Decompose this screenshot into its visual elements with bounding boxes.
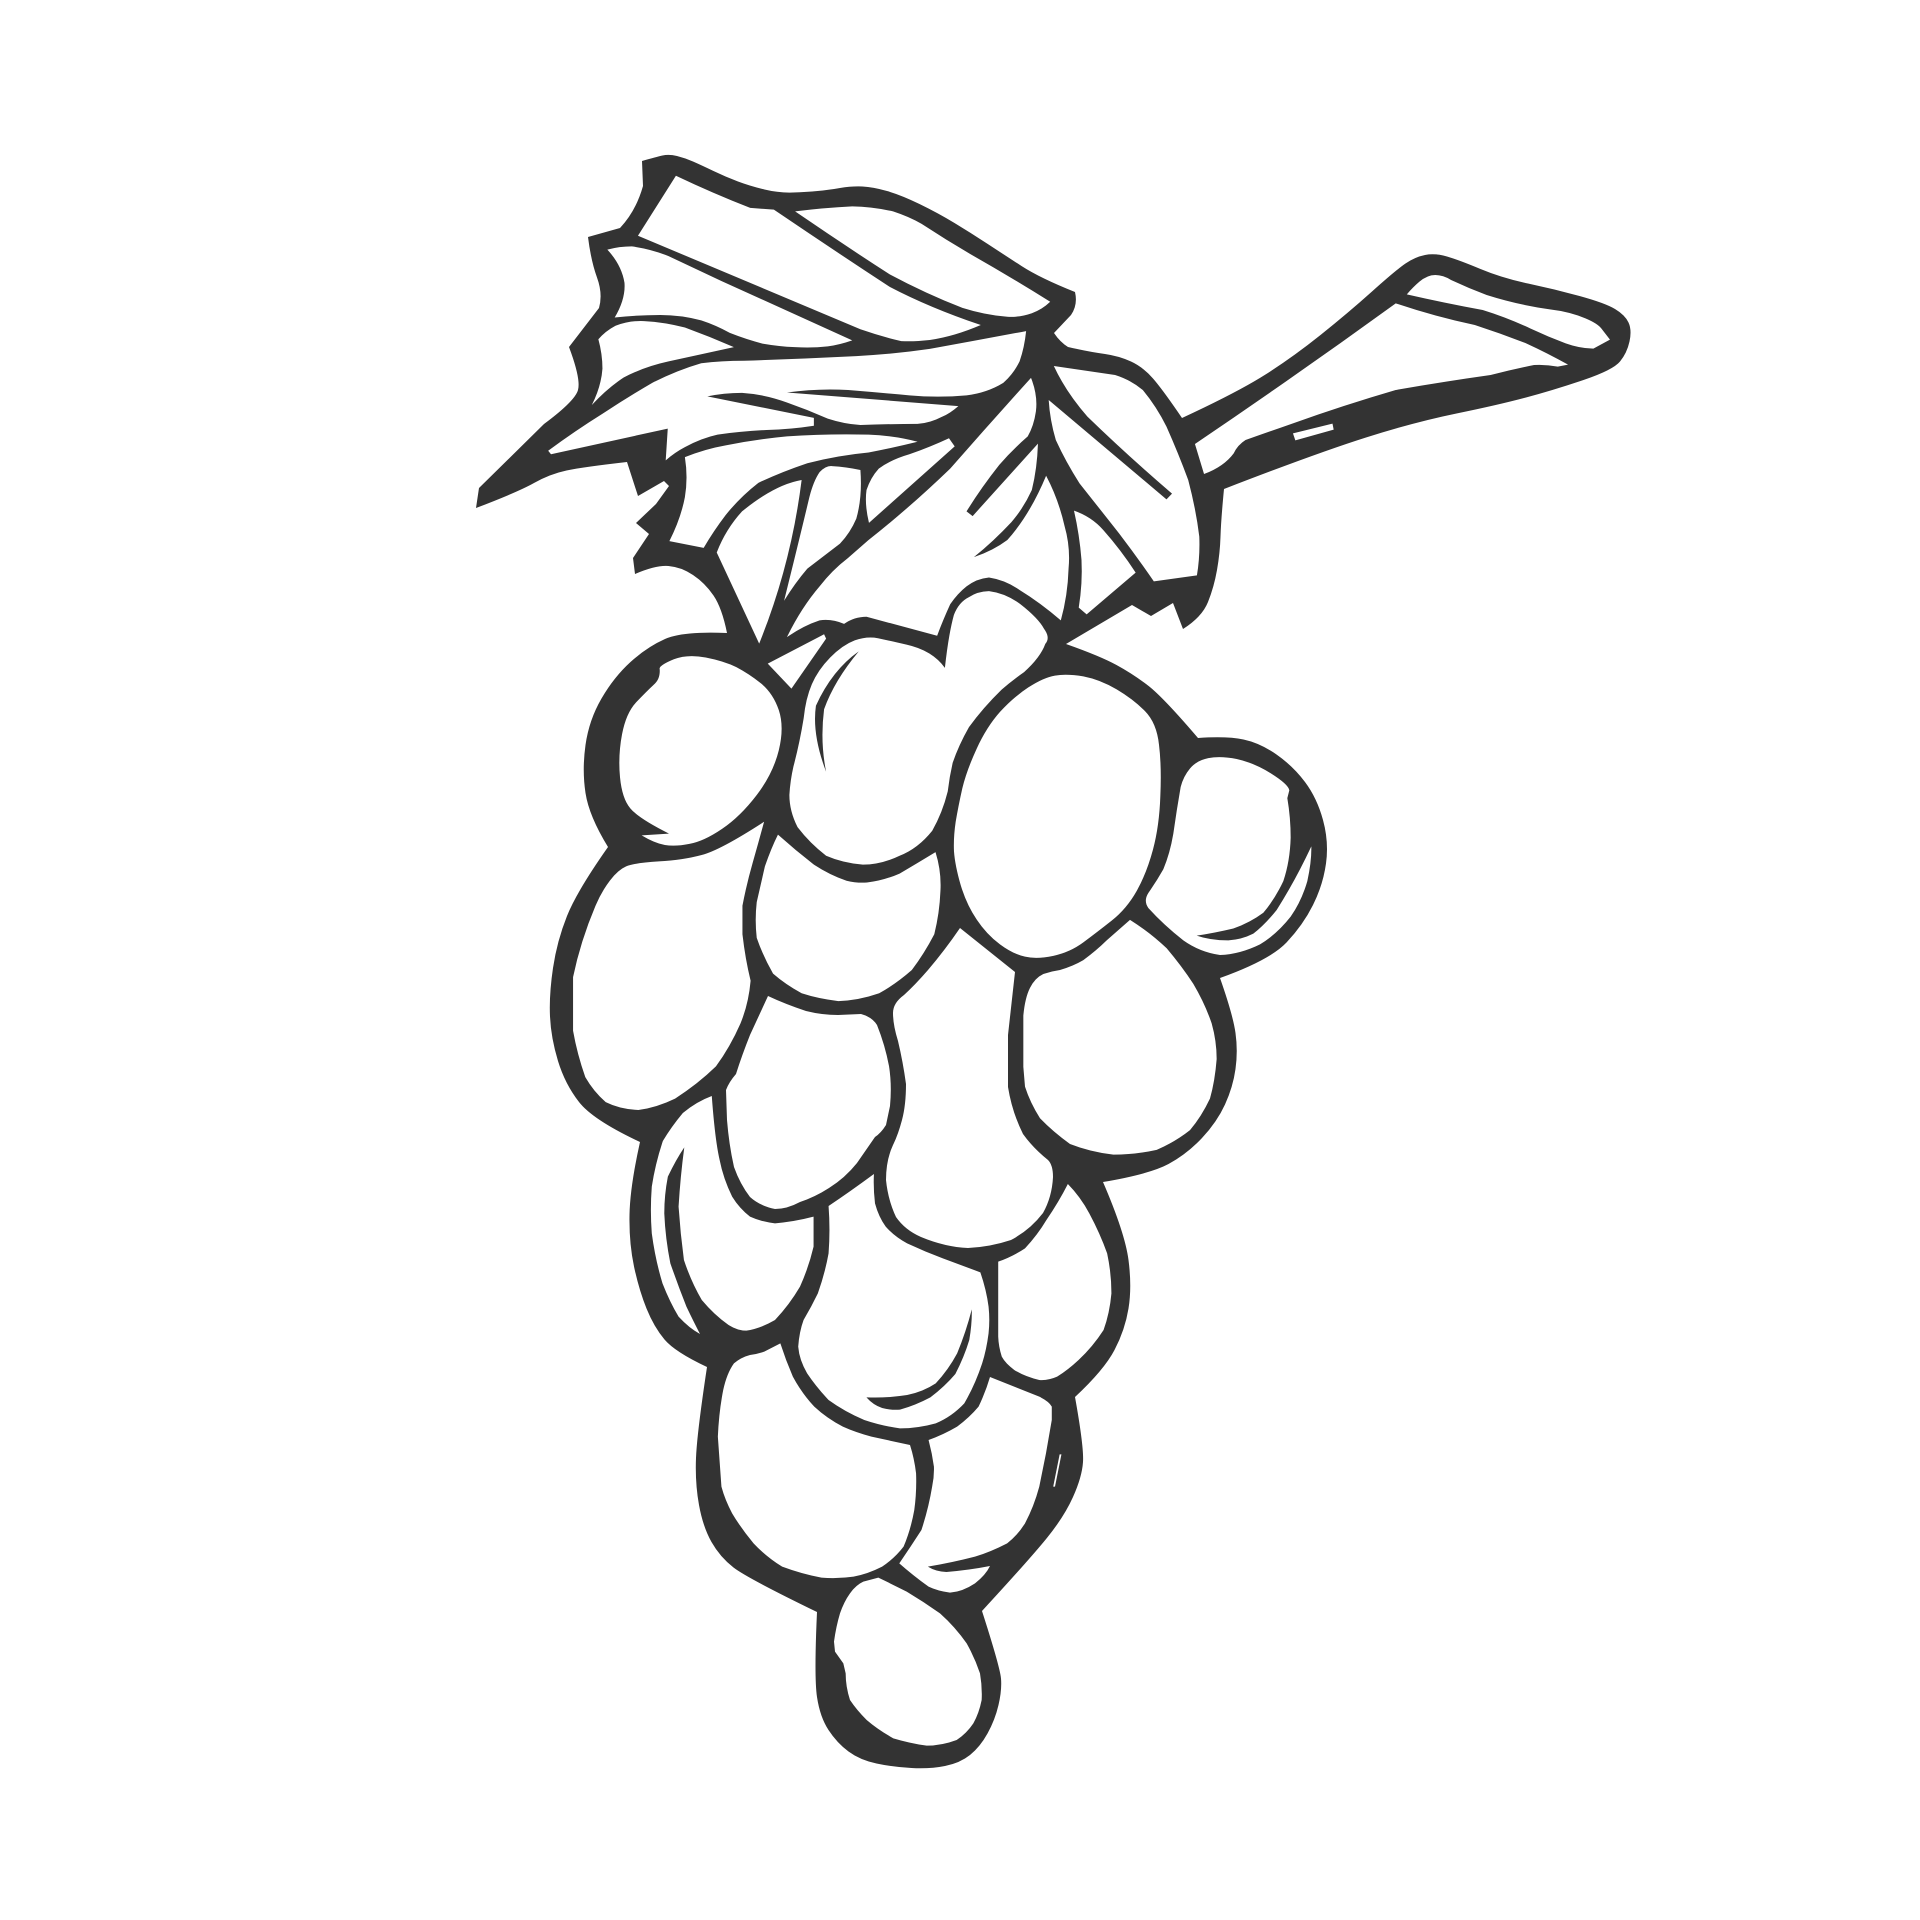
grape: middle lower centre <box>886 928 1053 1248</box>
grape: lower left with crescent <box>651 1096 814 1334</box>
right leaf: tip segment <box>1407 275 1610 349</box>
lower grapes <box>651 1096 1111 1593</box>
upper grapes <box>573 591 1048 1110</box>
leaf segment: lobe two <box>784 466 861 601</box>
right grapes <box>954 675 1311 1155</box>
right leaf holes <box>1049 275 1610 614</box>
grape: top left <box>619 656 782 846</box>
right leaf: small segment <box>1074 511 1136 614</box>
grape: lower middle <box>798 1174 989 1428</box>
grape: large right <box>954 675 1161 958</box>
leaf segment: lobe one <box>717 480 802 644</box>
grape: far right with highlight <box>1146 757 1311 955</box>
leaf segment: central with veins <box>787 378 1069 637</box>
top leaf and stem holes <box>548 176 1069 644</box>
leaf segment: left <box>592 321 734 405</box>
leaf segment: wide band with veins <box>548 331 1026 460</box>
grape: bottom single <box>834 1578 982 1746</box>
grape: large left <box>573 822 764 1110</box>
grape: lower right <box>998 1184 1111 1380</box>
grape: lower right <box>1023 920 1217 1155</box>
grape: lower left of centre <box>726 996 891 1209</box>
highlight on top middle grape <box>815 651 859 772</box>
right leaf: long segment <box>1195 303 1568 474</box>
grape: bottom right <box>899 1377 1052 1593</box>
leaf segment: top right <box>795 206 1050 317</box>
grape: bottom large <box>718 1343 916 1578</box>
small triangle under stem <box>768 634 826 689</box>
leaf segment: lower left <box>669 434 918 548</box>
silhouette: dark outline of bunch and leaves <box>476 155 1631 1768</box>
grape: top middle <box>789 591 1048 865</box>
grape: centre <box>756 835 941 1001</box>
right leaf: small slot <box>1293 424 1334 440</box>
highlight on lower middle grape <box>866 1309 972 1410</box>
thin highlight slit <box>1053 1454 1061 1487</box>
right leaf: inner segment with vein <box>1049 366 1199 581</box>
leaf segment: middle <box>607 246 852 348</box>
leaf segment: upper band <box>638 176 981 341</box>
leaf segment: lobe three <box>866 438 955 523</box>
